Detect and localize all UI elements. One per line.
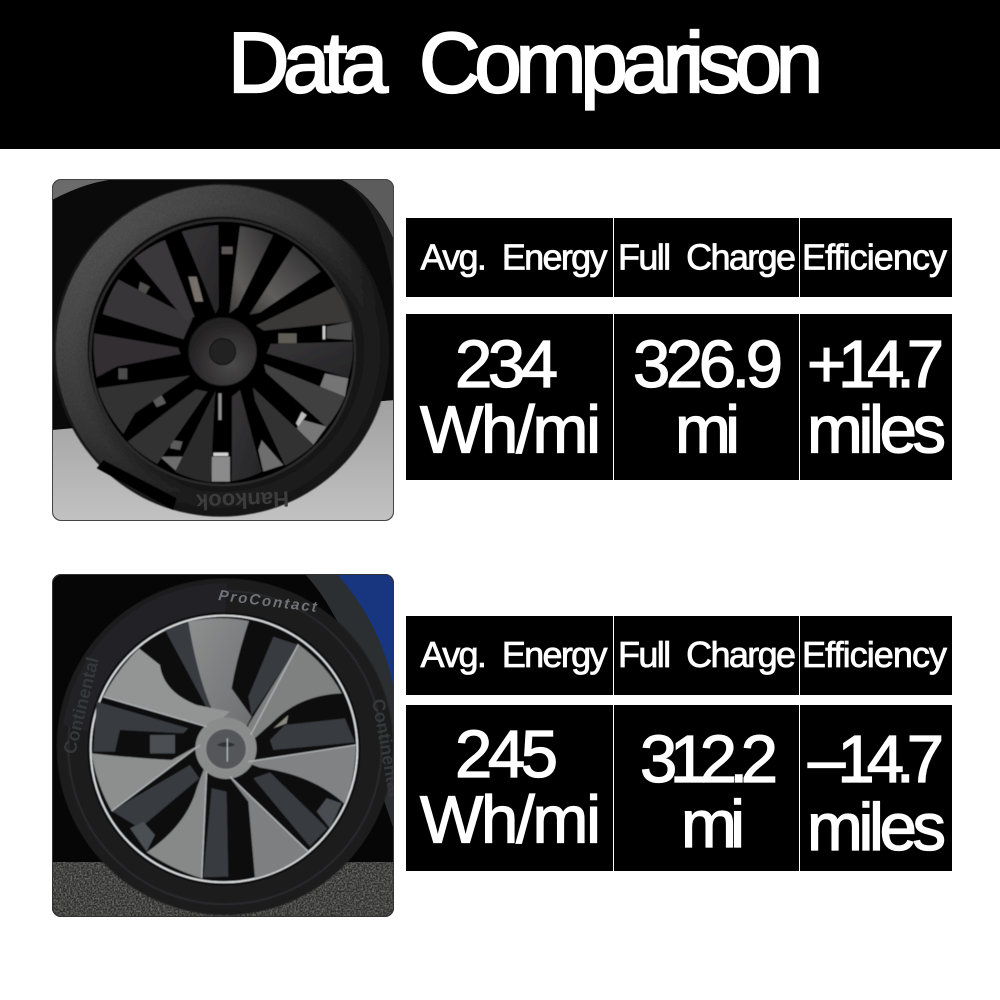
table 1 values: mi (675, 392, 740, 468)
tire brand text (59, 587, 405, 798)
table 2 values: Wh/mi (420, 782, 601, 858)
tire brand text: ProContact (218, 587, 320, 616)
floor (52, 400, 394, 521)
title: Comparison (419, 16, 823, 111)
hub (188, 317, 257, 386)
center cap (205, 728, 247, 770)
blades (92, 618, 356, 878)
table 1 values: +14.7 (807, 327, 944, 402)
table 1 header: Full Charge (618, 236, 796, 278)
title (228, 16, 823, 111)
tire brand text: Continental (368, 697, 405, 798)
tire (57, 578, 393, 915)
tire brand text: Hankook (195, 486, 289, 515)
inner panels (93, 622, 355, 877)
blade highlights (103, 644, 356, 878)
car body (338, 574, 394, 685)
table 1 header: Efficiency (802, 236, 947, 278)
photo: silver aero wheel (52, 574, 405, 917)
table 2 values: 312.2 (640, 722, 778, 797)
table 1 values: miles (807, 392, 946, 468)
spokes (94, 225, 353, 482)
rim (90, 220, 355, 485)
table 2 values: mi (681, 787, 745, 862)
table 2 header: Full Charge (618, 634, 796, 675)
table 2 header (406, 616, 952, 695)
tire brand text: Continental (59, 655, 103, 756)
title banner (0, 0, 1000, 149)
rim (87, 612, 361, 886)
table 2 values: miles (807, 790, 946, 865)
table 1 values: 234 (455, 327, 558, 402)
table 1 values (406, 314, 952, 480)
photo: black matte wheel (52, 179, 394, 521)
table 1 header: Avg. Energy (420, 236, 608, 278)
tire (53, 180, 389, 517)
table 2 header: Efficiency (802, 634, 947, 675)
fender arc (305, 574, 394, 830)
table 2 values: 245 (455, 717, 558, 792)
table 2 values (406, 705, 952, 871)
table 1 values: Wh/mi (420, 392, 601, 468)
table 2 header: Avg. Energy (420, 634, 608, 675)
road (52, 862, 394, 917)
title: Data (228, 16, 389, 111)
table 2 values: –14.7 (808, 722, 944, 797)
table 1 header (406, 218, 952, 297)
table 1 values: 326.9 (633, 327, 783, 402)
